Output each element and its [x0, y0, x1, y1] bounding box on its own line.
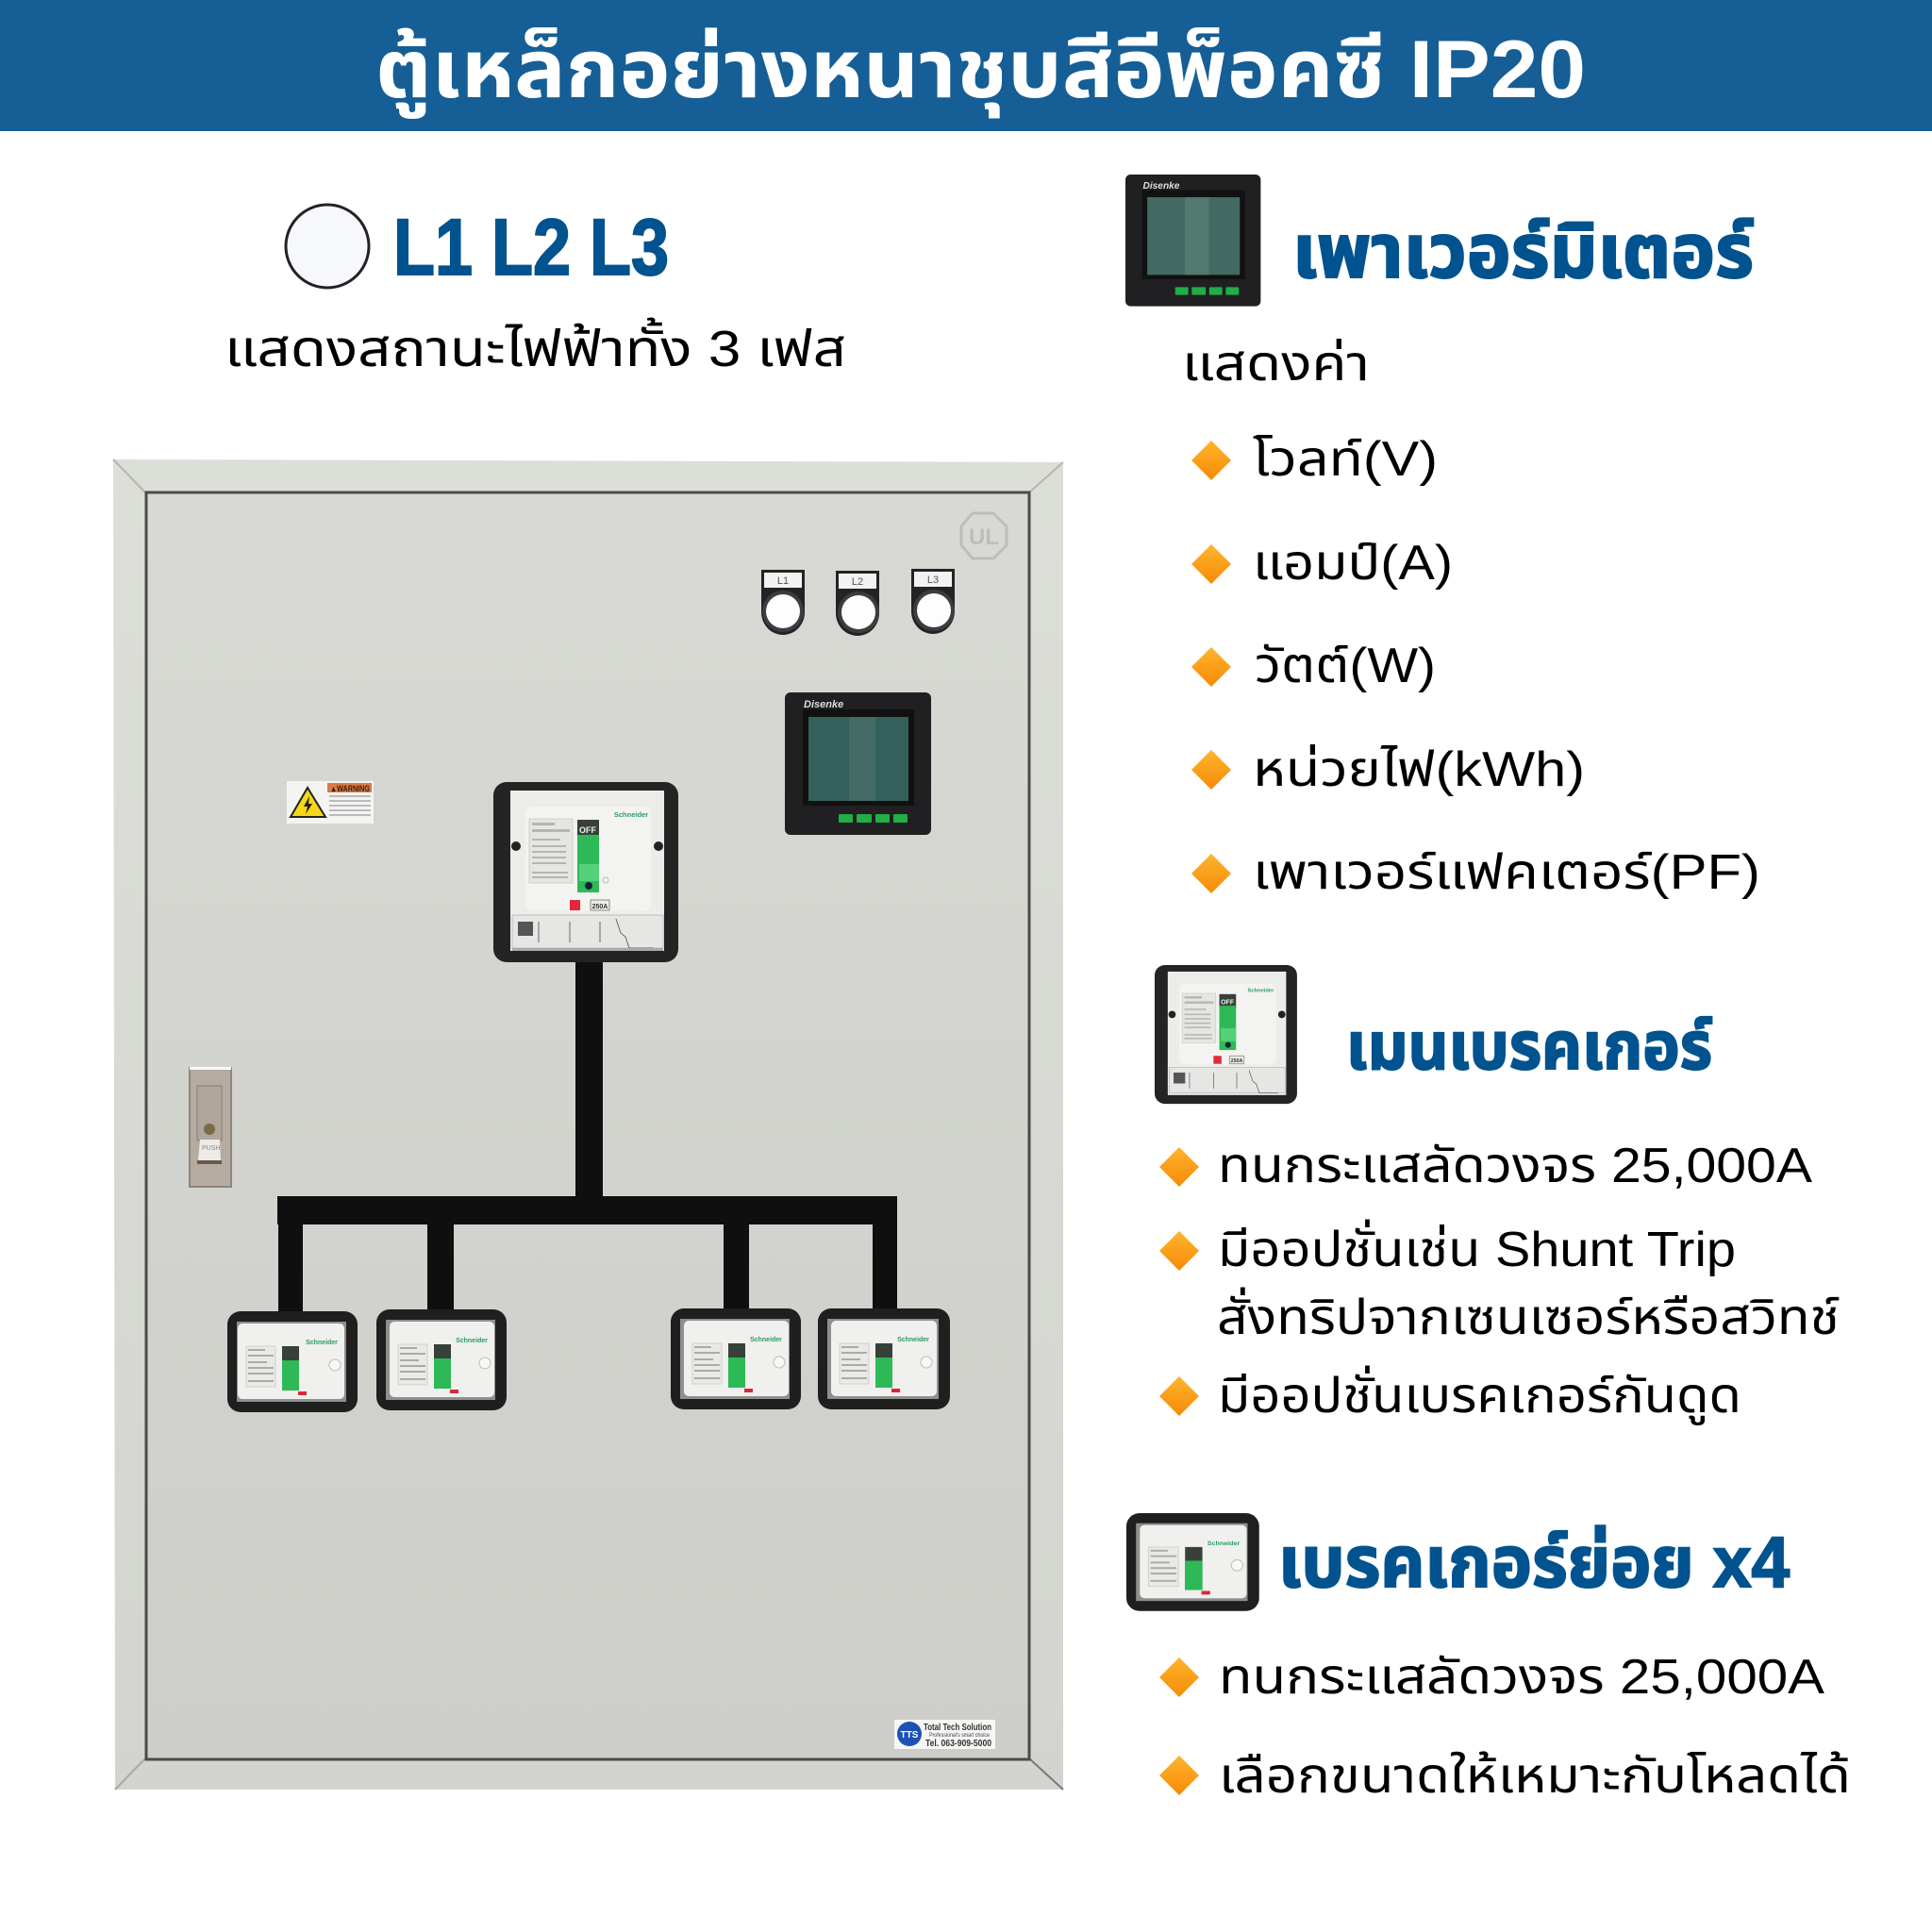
warning sticker: ▲WARNING	[330, 784, 370, 793]
list item: shunt trip option: สั่งทริปจากเซนเซอร์หรือสวิทช์	[1217, 1287, 1840, 1345]
branch breaker 2: Schneider	[456, 1338, 488, 1344]
branch breaker 3	[671, 1308, 801, 1409]
icon: UL mark: UL	[969, 525, 999, 550]
branch breaker 1	[227, 1311, 358, 1412]
wiring diagram: trunk and branches	[277, 958, 897, 1314]
branch breaker 2	[376, 1309, 507, 1410]
list item: selectable size: เลือกขนาดให้เหมาะกับโหลดได้	[1219, 1749, 1851, 1804]
list item: power factor: เพาเวอร์แฟคเตอร์(PF)	[1253, 845, 1760, 900]
list item: shunt trip option	[1159, 1219, 1840, 1345]
icon: UL mark	[961, 513, 1007, 558]
list item: RCD option: มีออปชั่นเบรคเกอร์กันดูด	[1218, 1365, 1741, 1425]
indicator lamp L1	[761, 570, 805, 635]
indicator lamp L2	[836, 571, 879, 636]
lamp description: แสดงสถานะไฟฟ้าทั้ง 3 เฟส	[225, 317, 846, 377]
branch breaker 3: Schneider	[750, 1337, 782, 1343]
icon: warning triangle	[291, 788, 325, 817]
main breaker on door	[493, 782, 678, 962]
icon: key lock	[204, 1124, 215, 1135]
icon: lamp	[286, 205, 369, 288]
icon: branch breaker	[1126, 1513, 1259, 1611]
list item: shunt trip option: มีออปชั่นเช่น Shunt Trip	[1218, 1219, 1736, 1277]
list item: short-circuit rating: ทนกระแสลัดวงจร 25,000A	[1218, 1139, 1812, 1193]
panel: steel cabinet	[113, 459, 1063, 1790]
company sticker: Tel. 063-909-5000	[925, 1739, 991, 1749]
power meter on door: Disenke	[804, 699, 843, 710]
main breaker on door: OFF	[579, 825, 596, 835]
power meter on door	[785, 692, 931, 835]
list item: watt: วัตต์(W)	[1255, 639, 1436, 693]
company sticker: Total Tech Solution	[924, 1723, 991, 1733]
icon: branch breaker: Schneider	[1208, 1541, 1241, 1547]
list item: amp	[1191, 536, 1453, 591]
company sticker	[894, 1720, 995, 1749]
heading: main breaker: เมนเบรคเกอร์	[1346, 1009, 1712, 1083]
branch breaker 1: Schneider	[306, 1340, 338, 1346]
list item: volt: โวลท์(V)	[1253, 432, 1438, 487]
main breaker on door: 250A	[592, 904, 608, 910]
branch breaker 4: Schneider	[897, 1337, 929, 1343]
list item: volt	[1191, 432, 1438, 487]
panel: branch breakers description	[1126, 1513, 1851, 1804]
icon: TTS logo: TTS	[901, 1730, 919, 1740]
warning sticker	[287, 781, 374, 824]
door latch	[190, 1067, 231, 1187]
company sticker: Professional's smart choice	[929, 1733, 991, 1739]
indicator lamp L3	[911, 569, 955, 634]
indicator lamp L2: L2	[852, 576, 863, 588]
list item: amp: แอมป์(A)	[1253, 536, 1453, 591]
branch breaker 4	[818, 1308, 950, 1409]
list item: short-circuit rating: ทนกระแสลัดวงจร 25,000A	[1219, 1650, 1824, 1705]
indicator lamp L1: L1	[777, 575, 789, 587]
title text: ตู้เหล็กอย่างหนาชุบสีอีพ็อคซี IP20	[375, 25, 1586, 119]
heading: branch breakers: เบรคเกอร์ย่อย x4	[1278, 1523, 1790, 1603]
indicator lamp L3: L3	[927, 575, 939, 586]
main breaker on door: Schneider	[614, 810, 648, 819]
heading: power meter: เพาเวอร์มิเตอร์	[1292, 209, 1754, 293]
list item: kWh: หน่วยไฟ(kWh)	[1253, 742, 1585, 797]
list item: watt	[1191, 639, 1436, 693]
door latch: PUSH	[202, 1145, 220, 1152]
heading: L1 L2 L3: L1 L2 L3	[393, 203, 669, 291]
icon: main breaker	[1155, 965, 1297, 1104]
panel: power meter description	[1125, 175, 1760, 900]
icon: main breaker: OFF	[1221, 1000, 1234, 1007]
icon: power meter: Disenke	[1143, 181, 1180, 192]
icon: main breaker: 250A	[1231, 1058, 1243, 1064]
callout: indicator lamps	[225, 203, 846, 377]
title banner	[0, 0, 1932, 131]
intro text: แสดงค่า	[1182, 337, 1370, 391]
icon: main breaker: Schneider	[1247, 988, 1274, 993]
icon: power meter	[1125, 175, 1260, 307]
panel: main breaker description	[1155, 965, 1840, 1425]
